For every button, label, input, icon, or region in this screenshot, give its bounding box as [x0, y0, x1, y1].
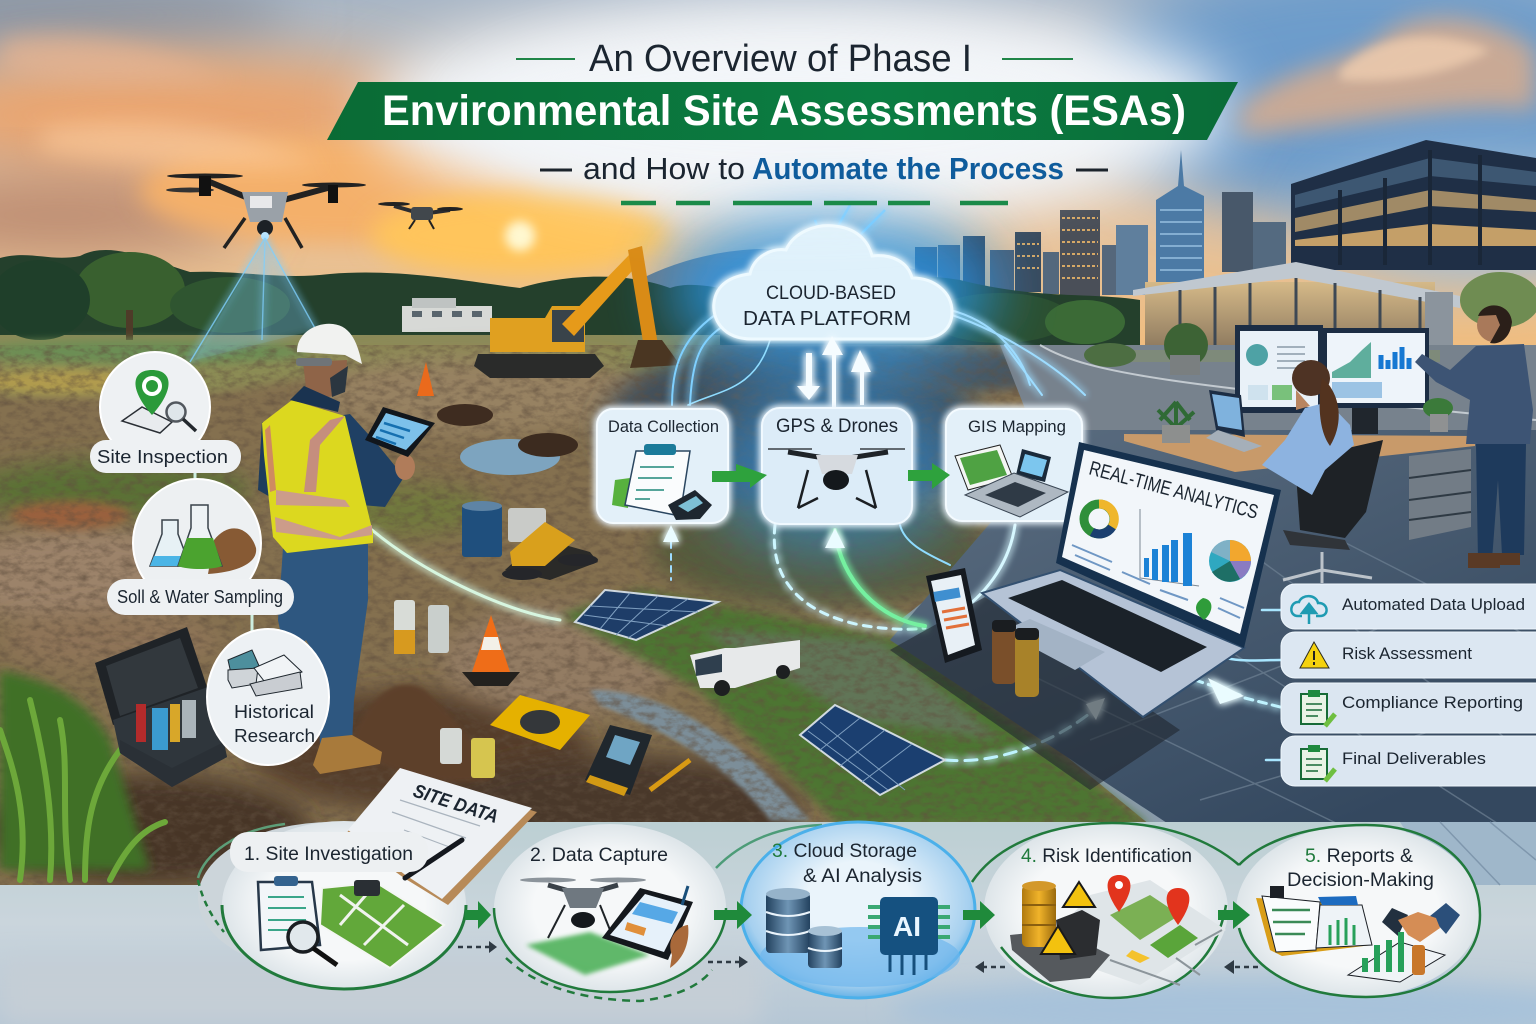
- sample bottles on desk: [992, 620, 1039, 697]
- card: data collection: [597, 409, 728, 523]
- step 3: cloud storage and AI analysis: [716, 822, 975, 998]
- step 3: cloud storage and AI analysis: & AI Analysis: [803, 866, 922, 887]
- item: final deliverables: [1281, 736, 1536, 786]
- hand: [395, 454, 415, 480]
- item: risk assessment: [1281, 632, 1536, 678]
- drums and yellow equipment: [462, 501, 598, 580]
- dashed arc: [198, 880, 224, 932]
- base: [982, 570, 1244, 717]
- donut chart: [1084, 504, 1114, 534]
- glass office tower: [1291, 140, 1536, 270]
- title dashes: [621, 201, 1008, 205]
- large traffic cone: [462, 615, 520, 686]
- low glass pavilion: [1133, 262, 1460, 352]
- cloud shape: [714, 226, 952, 339]
- cloud-based data platform: [714, 205, 952, 339]
- subtitle: and How to: [583, 151, 745, 186]
- outline arcs: [972, 823, 1239, 998]
- icon: dark container: [1056, 910, 1100, 960]
- bubble: [222, 821, 466, 989]
- dashed return arrows: [458, 947, 1262, 967]
- bubble: [984, 822, 1228, 998]
- legend lines: [1072, 545, 1244, 618]
- sky background: [0, 0, 1536, 360]
- card: data collection: Data Collection: [608, 417, 719, 436]
- label pill: [230, 832, 428, 872]
- sample jars: [394, 600, 449, 654]
- step 5: reports and decision-making: [1236, 825, 1480, 997]
- connector stem: [195, 473, 252, 632]
- item: automated data upload: Automated Data Upload: [1342, 595, 1525, 614]
- connector curves: [372, 310, 1281, 761]
- title line 1: An Overview of Phase I: [589, 38, 972, 80]
- site kit case: [95, 627, 227, 787]
- small laptop: [1206, 390, 1262, 452]
- step 1: site investigation: 1. Site Investigation: [244, 844, 413, 865]
- inset: site inspection: [90, 352, 241, 473]
- step 1: site investigation: [198, 768, 537, 989]
- icon: clipboard and map with magnifier: [258, 876, 444, 968]
- icon: blue grid platform: [760, 927, 960, 987]
- icon: report binder: [1256, 886, 1372, 956]
- yellow survey plate: [490, 695, 590, 750]
- title block: [327, 35, 1238, 205]
- neck and face: [303, 360, 347, 398]
- drone small: [378, 202, 463, 229]
- hard hat: [297, 324, 362, 364]
- dashed arc: [506, 958, 712, 1001]
- site data clipboard: [345, 768, 537, 905]
- desk scene: [1124, 305, 1533, 583]
- icon: handshake: [1382, 903, 1460, 942]
- icon: AI chip: [868, 897, 950, 975]
- far field: [0, 335, 720, 400]
- inset: site inspection: Site Inspection: [97, 447, 228, 467]
- icon: bar chart document: [1348, 932, 1445, 982]
- step 4: risk identification: [972, 822, 1239, 998]
- inset: historical research: Historical: [234, 702, 314, 722]
- phone: [926, 568, 982, 663]
- icon: rubble base: [1010, 930, 1110, 982]
- step 5: reports and decision-making: 5. Reports &: [1305, 846, 1413, 867]
- blue platform glow: [667, 205, 997, 560]
- site data clipboard: SITE DATA: [410, 781, 501, 828]
- man presenting: [1415, 305, 1533, 568]
- subtitle: Automate the Process: [752, 151, 1064, 186]
- item: compliance reporting: [1281, 683, 1536, 733]
- bubble: [207, 629, 329, 765]
- jeans: [278, 544, 368, 748]
- city skyline: [620, 140, 1536, 352]
- solar panel lower: [800, 705, 945, 795]
- left halo: [198, 822, 466, 974]
- handheld gauge: [585, 725, 690, 796]
- inset: soil and water sampling: [107, 479, 294, 615]
- top arc: [198, 824, 285, 878]
- cloud-based data platform: DATA PLATFORM: [743, 308, 911, 330]
- solar panel upper: [575, 590, 718, 640]
- bottom process band: [0, 822, 1536, 1024]
- subtitle: [540, 151, 1108, 186]
- item: final deliverables: Final Deliverables: [1342, 749, 1486, 768]
- woman at desk: [1262, 360, 1354, 495]
- icon: drone over green field: [520, 878, 650, 975]
- card: GIS mapping: GIS Mapping: [968, 417, 1066, 436]
- pie chart: [1209, 540, 1251, 582]
- filing drawers: [1409, 449, 1471, 540]
- icon: clipboard: [612, 444, 712, 520]
- right side pavement: [890, 345, 1536, 825]
- outline arc: [1239, 825, 1480, 997]
- card: GIS mapping: [946, 409, 1082, 521]
- icon: databases: [766, 888, 842, 968]
- outline arc: [494, 908, 726, 992]
- inset: historical research: [207, 629, 329, 765]
- icon: drone: [768, 449, 905, 508]
- drone main: [166, 174, 366, 248]
- step 2: data capture: [494, 824, 726, 1001]
- cloud glow rays: [815, 205, 885, 245]
- process arrows: [465, 901, 1250, 929]
- drone light beams: [190, 238, 316, 362]
- vest: [262, 400, 373, 553]
- jacket sleeve right: [325, 414, 404, 507]
- bubble: [494, 824, 726, 992]
- icon: parcel map: [1040, 880, 1226, 985]
- analytics laptop: REAL-TIME ANALYTICS: [1087, 458, 1260, 524]
- item: compliance reporting: Compliance Reporting: [1342, 693, 1523, 712]
- glowing arrowheads: [663, 525, 1244, 720]
- grass foreground bottom left: [0, 670, 165, 880]
- worker figure: [258, 324, 435, 774]
- green flow arrows: [712, 463, 950, 489]
- icon: laptops with map: [955, 445, 1068, 517]
- soil mound by worker: [350, 685, 490, 781]
- label pill: [90, 440, 241, 473]
- icon: warning signs: [1041, 882, 1095, 954]
- icon: AI chip: AI: [893, 911, 921, 942]
- tree clump: [0, 252, 1125, 344]
- title banner: Environmental Site Assessments (ESAs): [382, 87, 1186, 135]
- step 3: cloud storage and AI analysis: 3. Cloud Storage: [772, 841, 917, 862]
- trackpad: [1002, 619, 1105, 670]
- bubble: [741, 822, 975, 998]
- boot: [313, 735, 382, 774]
- monitors: [1235, 325, 1429, 434]
- jacket sleeve left: [258, 422, 280, 498]
- ground: site terrain: [0, 340, 1180, 885]
- excavator: [474, 246, 680, 378]
- label pill: [107, 579, 294, 615]
- step 2: data capture: 2. Data Capture: [530, 845, 668, 866]
- title glow: [465, 35, 1125, 205]
- potted plants: [1158, 398, 1453, 443]
- collar: [290, 386, 340, 412]
- far traffic cone: [417, 362, 434, 396]
- analytics laptop: [982, 442, 1281, 717]
- icon: yellow drum: [1022, 881, 1056, 947]
- outline arc: [222, 905, 466, 989]
- screen: [1056, 442, 1281, 648]
- right panel list: [1281, 584, 1536, 786]
- utility truck: [690, 640, 800, 696]
- shrubs and planters by road: [1084, 272, 1536, 375]
- desk: [1124, 434, 1475, 472]
- office chair: [1283, 440, 1383, 583]
- dashed arrow heads: [489, 941, 1234, 974]
- item: automated data upload: [1281, 584, 1536, 629]
- step 5: reports and decision-making: Decision-Making: [1287, 870, 1434, 891]
- bubble: [133, 479, 261, 607]
- arrows between cloud and cards: [797, 336, 871, 407]
- step 4: risk identification: 4. Risk Identification: [1021, 846, 1192, 867]
- cloud-based data platform: CLOUD-BASED: [766, 283, 896, 304]
- bar chart: [1140, 509, 1199, 586]
- icon: red pins: [1108, 875, 1189, 925]
- bubble: [100, 352, 210, 462]
- bubble: [1236, 825, 1480, 997]
- keyboard: [1008, 580, 1207, 672]
- card: GPS and drones: GPS & Drones: [776, 416, 898, 437]
- icon: stacked books: [228, 650, 302, 696]
- distant tree line: [0, 250, 1140, 345]
- inset: soil and water sampling: Soll & Water Sampling: [117, 587, 283, 607]
- inset: historical research: Research: [234, 726, 315, 746]
- tablet: [365, 407, 435, 457]
- small leaf badge: [1196, 598, 1211, 620]
- dark desk slab: [890, 597, 1180, 790]
- muddy pond: [437, 404, 578, 475]
- card: GPS and drones: [762, 408, 912, 524]
- item: risk assessment: Risk Assessment: [1342, 644, 1472, 663]
- small jars on soil: [440, 728, 495, 778]
- icon: tablet in hand: [602, 886, 693, 968]
- distant white building: [402, 298, 492, 332]
- icon: flasks and soil: [150, 505, 256, 574]
- icon: map pin and magnifier: [122, 370, 196, 433]
- top green arc: [716, 825, 822, 868]
